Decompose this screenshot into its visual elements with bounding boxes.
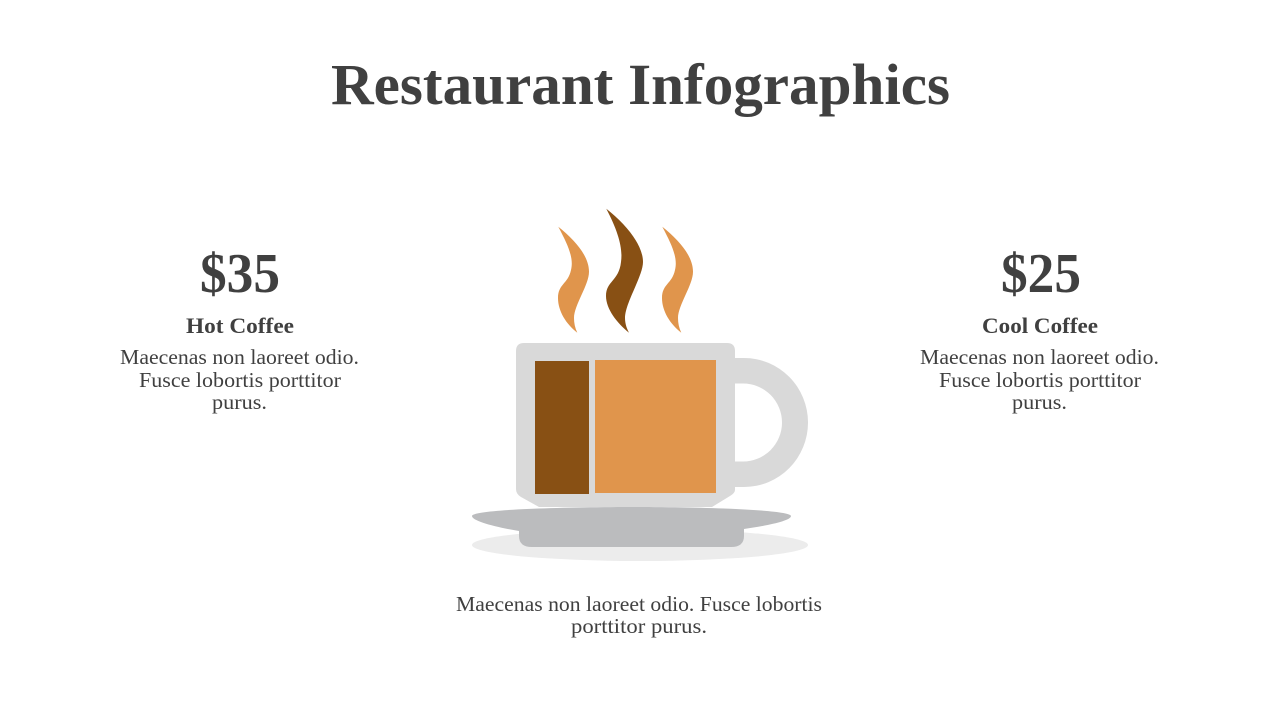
cool coffee description: Maecenas non laoreet odio. [920,345,1159,369]
hot coffee heading: Hot Coffee [186,313,294,338]
hot coffee description: purus. [212,390,267,414]
cup handle [730,358,808,487]
steam left [558,227,589,333]
saucer shadow [472,529,808,561]
light coffee fill [595,360,716,493]
bottom description: porttitor purus. [571,614,707,638]
title: Restaurant Infographics [331,52,950,117]
hot coffee description: Fusce lobortis porttitor [139,368,341,392]
saucer [472,507,791,547]
cup body [516,343,735,507]
bottom description [456,592,822,638]
icon: coffee cup [472,209,808,561]
cool coffee description: Fusce lobortis porttitor [939,368,1141,392]
hot coffee description [120,345,359,414]
cool coffee description [920,345,1159,414]
cool coffee heading: Cool Coffee [982,313,1098,338]
cool coffee price: $25 [1001,243,1081,305]
bottom description: Maecenas non laoreet odio. Fusce lobortis [456,592,822,616]
panel: cool coffee [920,243,1159,414]
steam right [662,227,693,333]
hot coffee description: Maecenas non laoreet odio. [120,345,359,369]
panel: hot coffee [120,243,359,414]
cool coffee description: purus. [1012,390,1067,414]
dark coffee fill [535,361,589,494]
hot coffee price: $35 [200,243,280,305]
steam middle [606,209,643,333]
